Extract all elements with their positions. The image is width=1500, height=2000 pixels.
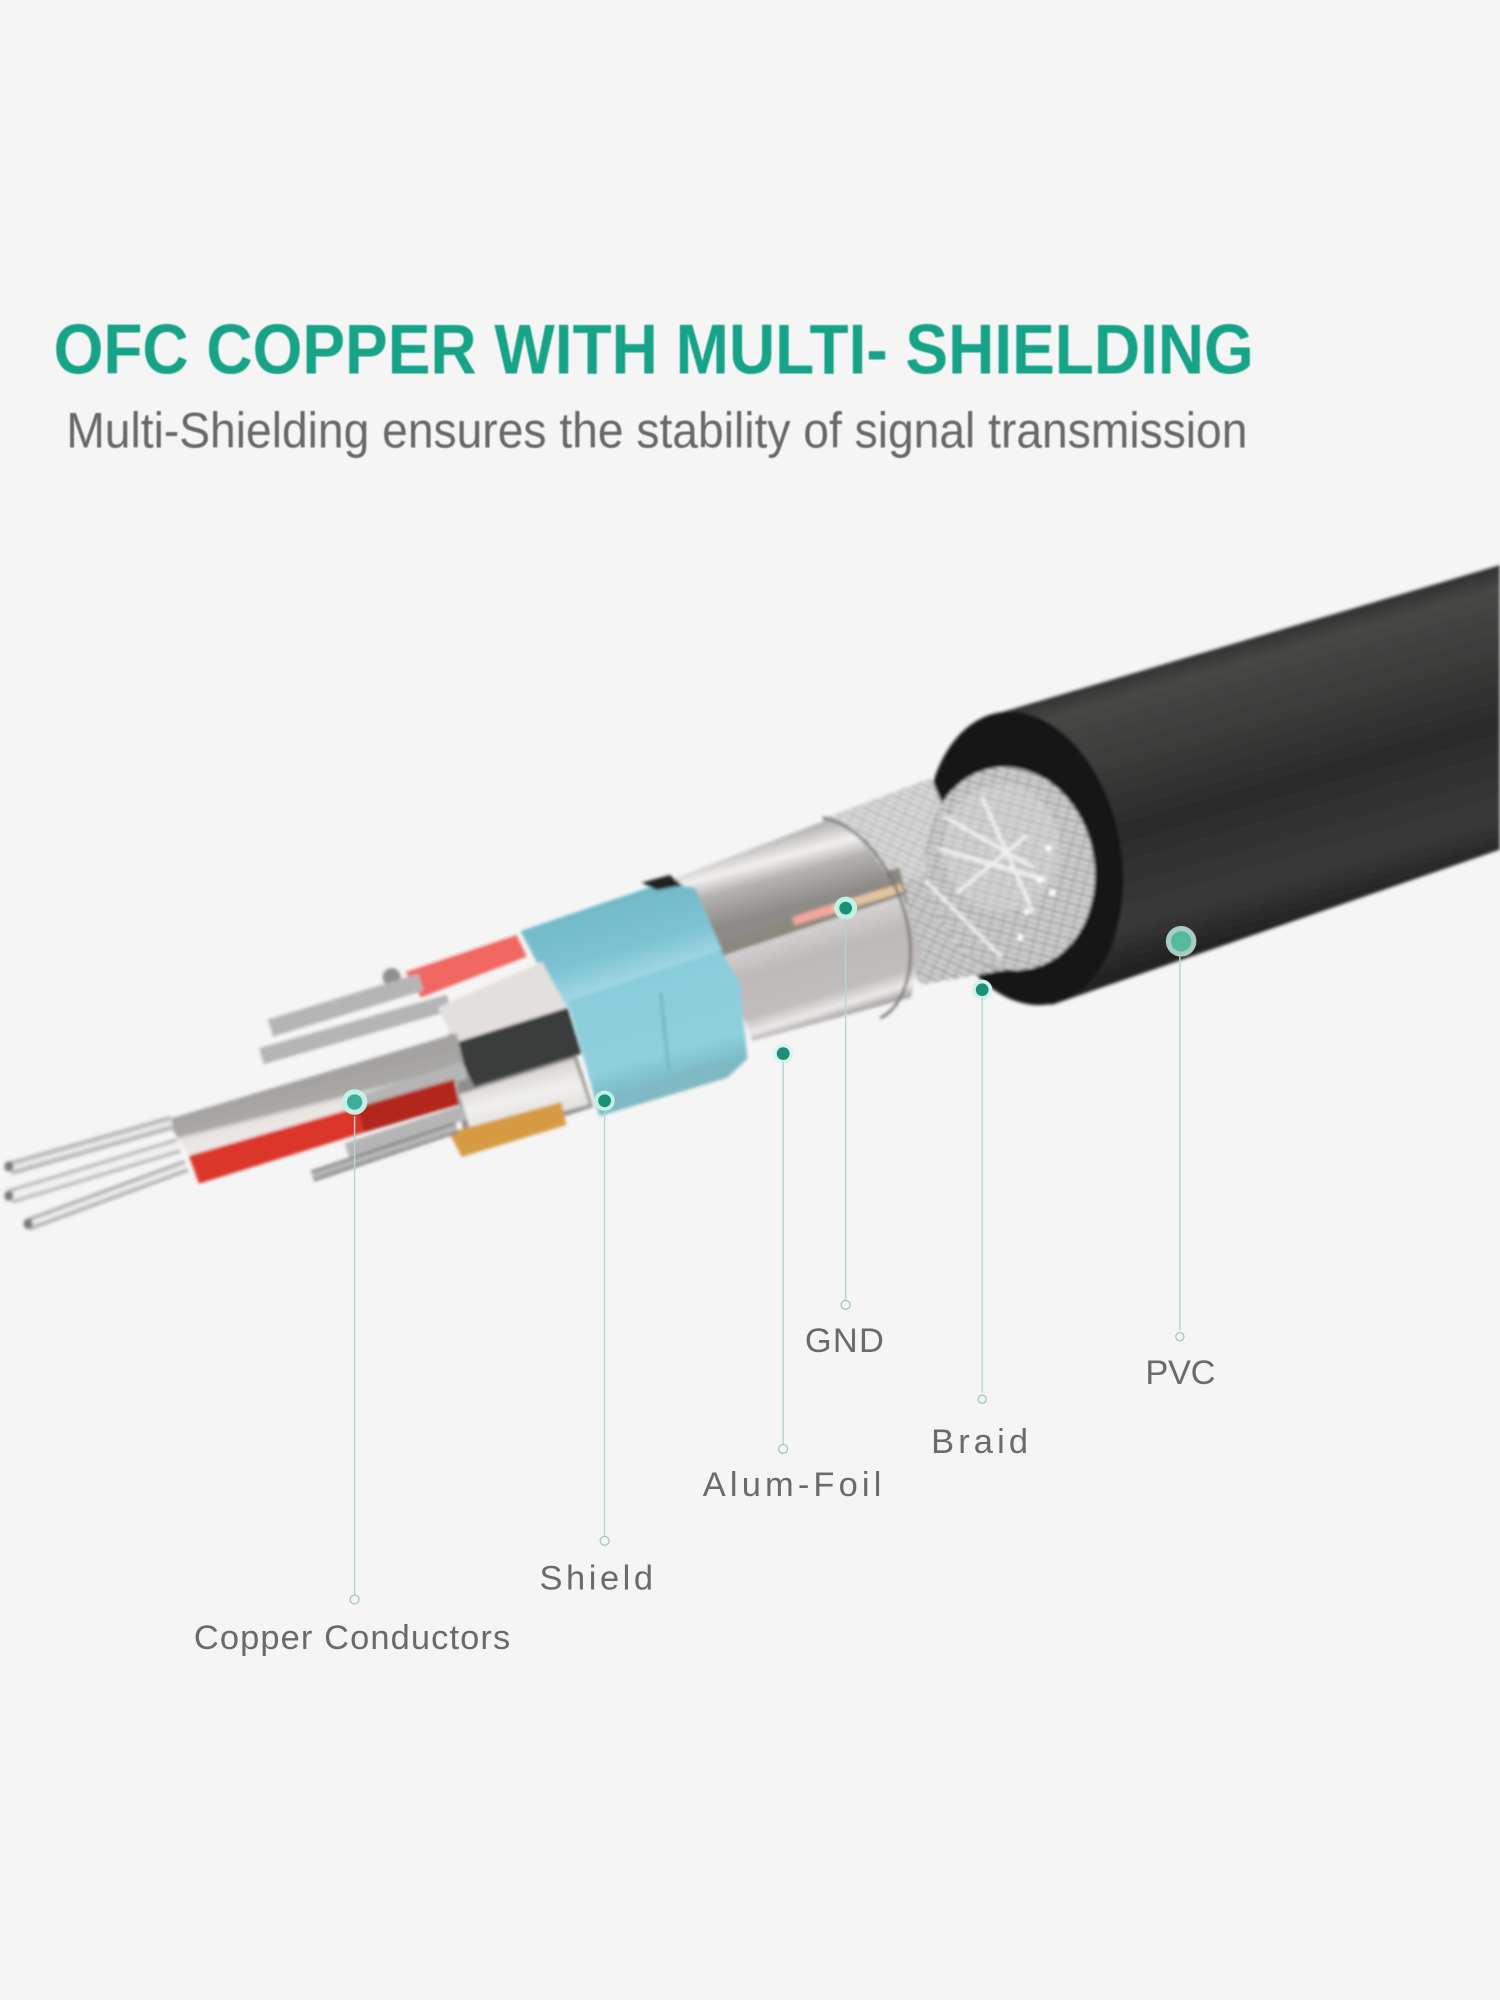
callout: Shield [540,1091,653,1597]
lower foil tube [721,895,921,1041]
gap wires between foil tubes [695,867,908,969]
callout: PVC: PVC [1145,1354,1216,1392]
PVC jacket body [999,565,1500,1005]
foil collar edge [823,818,911,1018]
upper strands [261,982,449,1056]
front strands [9,1122,186,1224]
upper blue shield [520,875,722,1008]
upper red conductor [383,935,527,997]
lower red conductor [189,1079,459,1184]
callout: Braid [931,980,1028,1461]
callout: PVC [1145,926,1216,1392]
callout: Braid: Braid [931,1423,1028,1461]
callout: Copper Conductors: Copper Conductors [194,1619,510,1657]
orange conductor [449,1102,566,1157]
callout: Copper Conductors [194,1089,510,1657]
black conductor [453,1008,582,1087]
subtitle: Multi-Shielding ensures the stability of signal transmission [66,403,1247,459]
white conductor [438,962,570,1048]
lower strands [312,1112,464,1176]
braid tube [823,754,1111,985]
callout: GND: GND [805,1322,884,1360]
title: OFC COPPER WITH MULTI- SHIELDING [54,310,1254,389]
lower white conductor [459,1059,589,1135]
callout: Alum-Foil: Alum-Foil [703,1466,881,1504]
cable illustration [9,565,1500,1224]
upper foil tube [670,820,893,946]
large gray and white conductor [166,1033,467,1158]
callout: Shield: Shield [540,1559,653,1597]
strand underlay behind conductors [449,1008,593,1148]
PVC jacket end ring [903,696,1145,1021]
lower blue shield [568,950,747,1116]
callout: GND [805,897,884,1360]
callout: Alum-Foil [703,1043,881,1504]
